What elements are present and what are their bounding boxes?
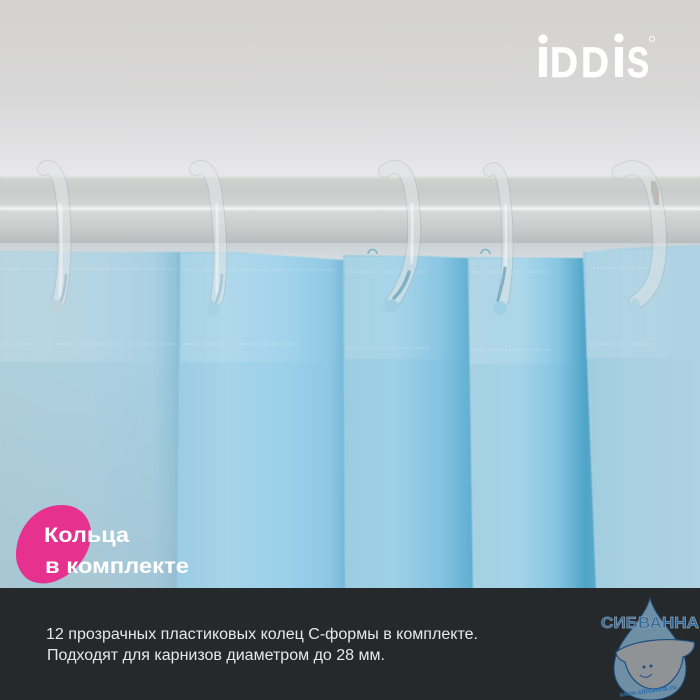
heading: Кольца [44,524,129,547]
description text [46,626,478,664]
curtain rod [0,175,700,243]
iddis logo: D [581,39,609,87]
heading [44,524,189,578]
shower curtain [0,245,700,590]
iddis logo: S [627,39,649,87]
description text: 12 прозрачных пластиковых колец С-формы в комплекте. [46,626,478,643]
curtain eyelets [368,250,490,254]
plastic ring 4 [489,168,508,315]
description text: Подходят для карнизов диаметром до 28 мм. [47,647,385,664]
sibvanna watermark: СИБВАННА [601,615,699,632]
sibvanna watermark [601,598,699,700]
pink accent blob [16,505,91,583]
plastic ring 5 [619,168,660,312]
curtain hem bands [0,250,700,364]
sibvanna watermark: www.sibvanna.ru [618,684,677,699]
heading: в комплекте [45,555,189,578]
plastic ring 1 [44,167,66,314]
under-rod band [0,240,700,270]
iddis logo [538,33,655,87]
iddis logo: D [550,39,578,87]
plastic ring 2 [196,167,222,316]
wall background [0,0,700,178]
plastic ring 3 [383,167,414,312]
footer band [0,588,700,700]
